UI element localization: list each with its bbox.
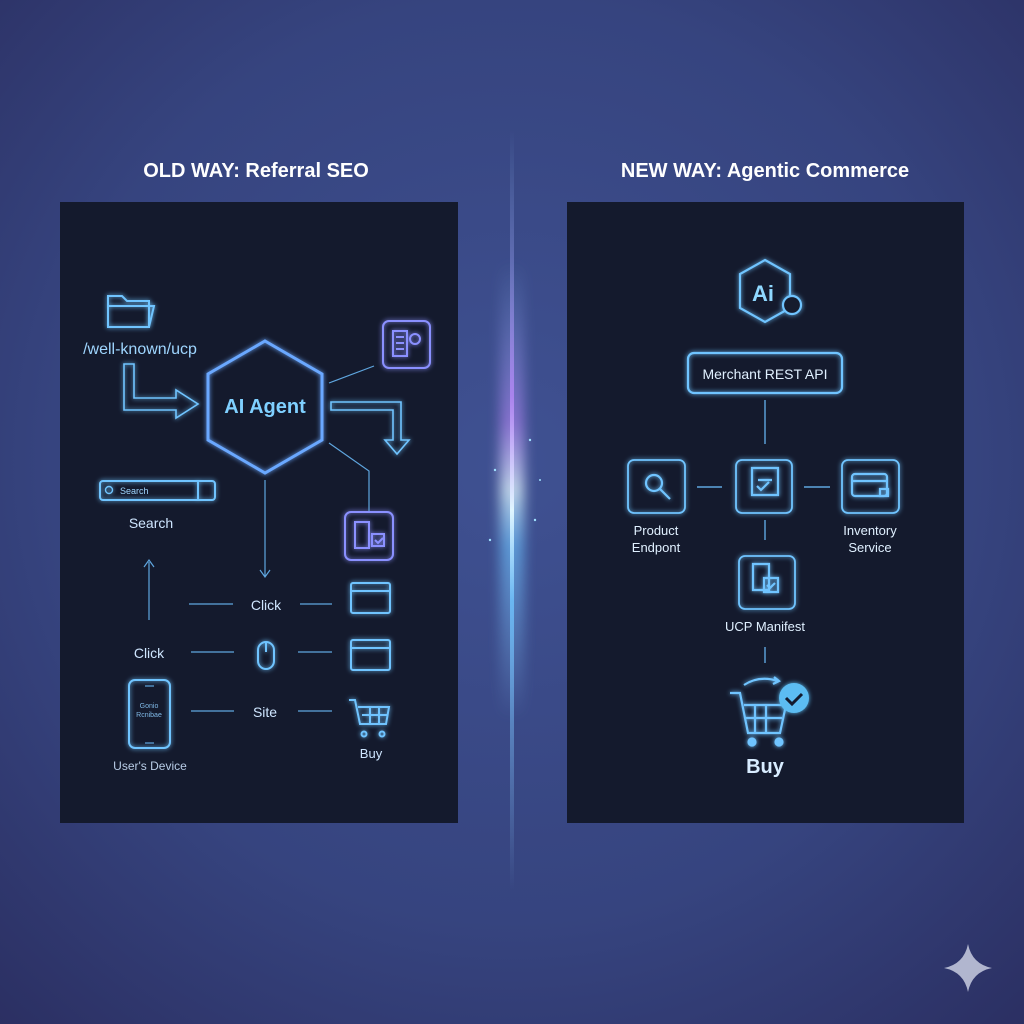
cart [349, 700, 389, 724]
icon: folder [108, 296, 154, 327]
panel: new way: UCP Manifest [725, 619, 805, 634]
panel: old way: User's Device [113, 759, 187, 773]
panel: new way: Service [848, 540, 892, 555]
panel: old way: Buy [360, 746, 383, 761]
check badge [779, 683, 809, 713]
icon: doc check box [345, 512, 393, 560]
mouse [258, 642, 274, 669]
panel: old way: AI Agent [224, 396, 306, 418]
magnifier [646, 475, 662, 491]
panel: old way: Click [134, 645, 165, 661]
divider beam [489, 130, 541, 890]
panel: new way: Endpont [632, 540, 681, 555]
panel: old way: Site [253, 704, 277, 720]
panel: new way [567, 202, 964, 823]
title: old way: OLD WAY: Referral SEO [143, 160, 369, 182]
title: new way: NEW WAY: Agentic Commerce [621, 160, 909, 182]
panel: old way: Rcnibae [136, 712, 162, 719]
panel: old way: Click [251, 597, 282, 613]
arrow: left into agent [124, 364, 198, 418]
clipboard [752, 468, 778, 495]
icon: sparkle [944, 944, 992, 992]
panel: new way: Ai [752, 281, 774, 306]
icon: doc chat box [383, 321, 430, 368]
search bar [100, 481, 215, 500]
box icons [628, 460, 685, 513]
windows [351, 583, 390, 613]
box: merchant REST API [688, 353, 842, 393]
panel: new way: Merchant REST API [702, 366, 828, 382]
card [852, 474, 887, 496]
icon: AI hexagon [740, 260, 790, 322]
hexagon: AI Agent [208, 341, 322, 473]
cart [730, 693, 786, 733]
phone [129, 680, 170, 748]
arrow: right down [331, 402, 409, 454]
panel: old way [60, 202, 458, 823]
panel: old way: Search [120, 486, 149, 496]
panel: old way: Search [129, 515, 173, 531]
panel: new way: Inventory [843, 523, 897, 538]
panel: new way: Product [634, 523, 679, 538]
panel: old way: Gonio [140, 703, 158, 710]
manifest doc [753, 564, 778, 592]
labels: /well-known/ucp [83, 341, 197, 358]
panel: new way: Buy [746, 756, 785, 778]
